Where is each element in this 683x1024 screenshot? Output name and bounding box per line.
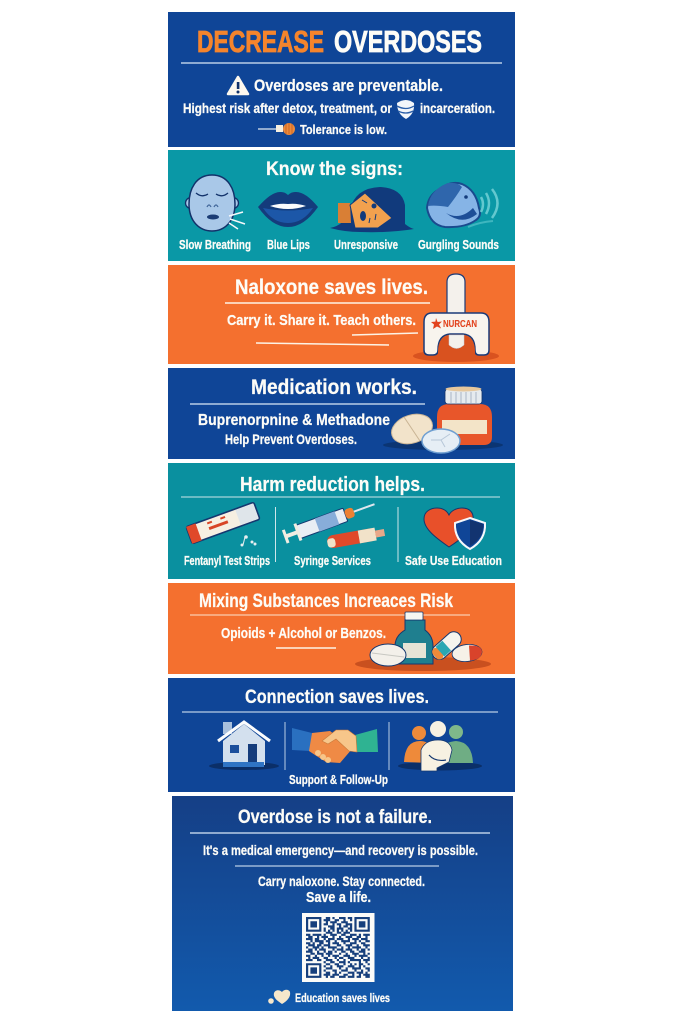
icon: pill bottle and tablets xyxy=(383,386,503,453)
icon: nasal spray: NURCAN xyxy=(443,319,477,330)
icon: warning triangle xyxy=(228,77,248,94)
text: opioids: Opioids + Alcohol or Benzos. xyxy=(221,626,386,642)
text: medical emergency: It's a medical emergency—and recovery is possible. xyxy=(203,842,478,858)
title xyxy=(197,24,482,59)
heading: Naloxone saves lives. xyxy=(235,275,428,299)
panel: medication xyxy=(168,368,515,459)
icon: handshake xyxy=(292,728,378,763)
text: help prevent: Help Prevent Overdoses. xyxy=(225,432,357,447)
icon: syringe and tube xyxy=(281,496,386,549)
label: syringe: Syringe Services xyxy=(294,554,371,568)
panel: know the signs xyxy=(168,150,515,261)
panel: harm reduction xyxy=(168,463,515,579)
text: save a life: Save a life. xyxy=(306,890,371,906)
text: overdoses are preventable: Overdoses are preventable. xyxy=(254,77,443,95)
text: tolerance is low: Tolerance is low. xyxy=(300,122,387,137)
label: slow breathing: Slow Breathing xyxy=(179,238,251,252)
icon: syringe and hand xyxy=(258,123,295,135)
title: DECREASE xyxy=(197,24,324,59)
panel: connection xyxy=(168,678,515,792)
heading: Know the signs: xyxy=(266,158,403,180)
label: blue lips: Blue Lips xyxy=(267,238,310,252)
icon: gurgling person xyxy=(427,183,498,227)
panel: overdose is not a failure xyxy=(172,796,513,1011)
icon: unresponsive person xyxy=(330,187,414,232)
icon: heart xyxy=(268,990,290,1004)
icon: mask xyxy=(397,100,414,119)
text: carry naloxone: Carry naloxone. Stay connected. xyxy=(258,874,425,889)
label: fentanyl: Fentanyl Test Strips xyxy=(184,554,270,568)
text: highest risk: Highest risk after detox, treatment, or xyxy=(183,101,393,116)
panel: header xyxy=(168,12,515,147)
label: safe use: Safe Use Education xyxy=(405,553,502,568)
heading: Medication works. xyxy=(251,376,417,399)
heading: Mixing Substances Increaces Risk xyxy=(199,591,453,612)
heading: Harm reduction helps. xyxy=(240,474,425,496)
label: gurgling sounds: Gurgling Sounds xyxy=(418,238,499,252)
heading: Overdose is not a failure. xyxy=(238,806,432,828)
heading: Connection saves lives. xyxy=(245,686,429,708)
text: buprenorphine: Buprenorpnine & Methadone xyxy=(198,412,390,429)
panel: mixing substances xyxy=(168,583,515,674)
panel: naloxone xyxy=(168,265,515,364)
icon: heart and shield xyxy=(424,508,485,549)
QR code xyxy=(302,913,374,982)
title: OVERDOSES xyxy=(334,24,482,59)
icon: nasal spray xyxy=(413,274,499,362)
icon: bottle and pills xyxy=(355,612,491,671)
icon: house xyxy=(209,722,279,770)
text: incarceration: incarceration. xyxy=(420,101,495,116)
label: unresponsive: Unresponsive xyxy=(334,238,398,252)
text: carry it: Carry it. Share it. Teach others. xyxy=(227,312,416,329)
icon: group of people xyxy=(398,721,482,771)
text: education saves lives: Education saves lives xyxy=(295,991,390,1005)
icon: slow breathing face xyxy=(186,175,245,231)
label: support and follow-up: Support & Follow-Up xyxy=(289,773,388,787)
icon: fentanyl test strip xyxy=(186,502,260,546)
icon: blue lips xyxy=(258,192,318,227)
